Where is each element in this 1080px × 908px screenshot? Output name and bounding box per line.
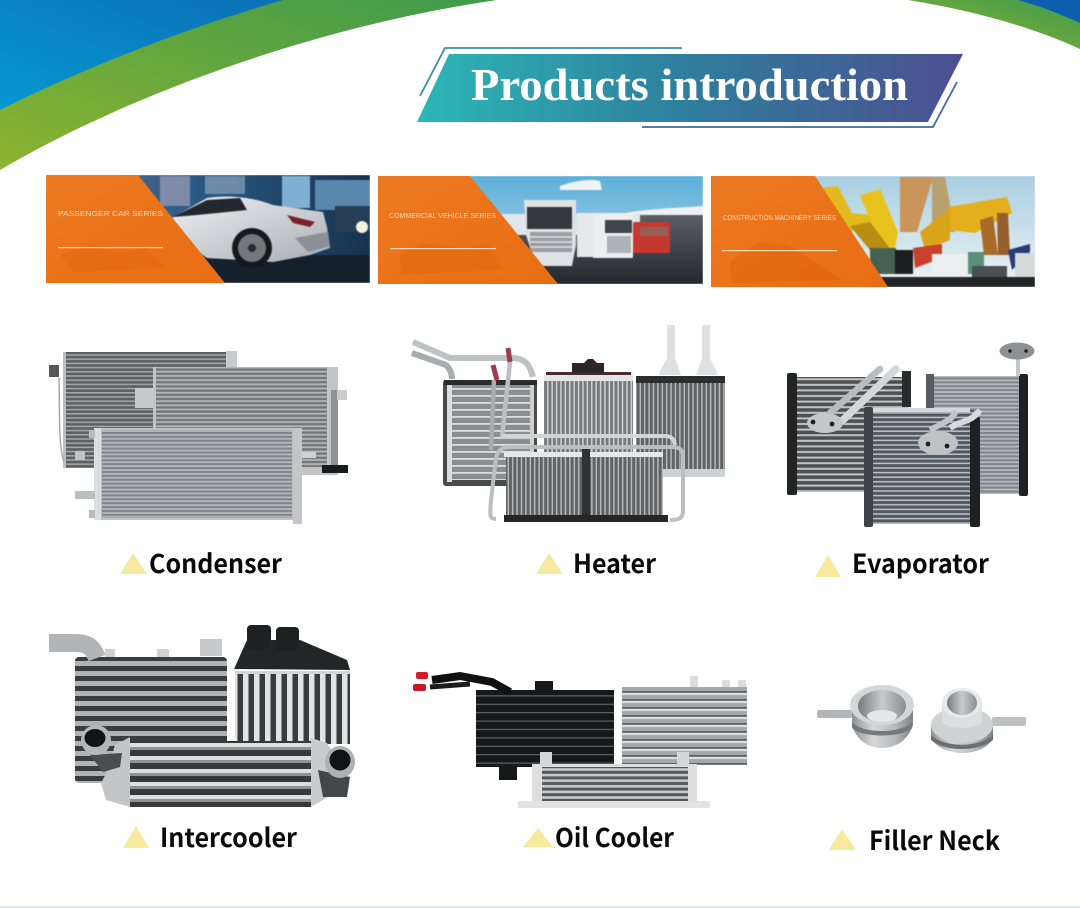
- left heater: [412, 342, 537, 486]
- label: Heater: [536, 544, 657, 581]
- marker triangle: [523, 828, 553, 847]
- label: Filler Neck: Filler Neck: [869, 821, 1000, 858]
- right filler neck: [931, 688, 1026, 753]
- front evaporator: [864, 407, 980, 527]
- product image: oil coolers: [413, 672, 747, 808]
- front intercooler: [81, 725, 355, 807]
- silver oil cooler: [622, 676, 747, 765]
- card 2 label: COMMERCIAL VEHICLE SERIES: [389, 211, 496, 220]
- left evaporator: [787, 371, 911, 495]
- label: Heater: Heater: [573, 544, 657, 581]
- marker triangle: [123, 826, 149, 848]
- middle condenser: [135, 367, 348, 475]
- series card: commercial vehicle: [378, 176, 703, 284]
- middle heater: [544, 359, 633, 455]
- left filler neck: [817, 685, 914, 748]
- marker triangle: [120, 553, 147, 574]
- card 1 label: PASSENGER CAR SERIES: [58, 209, 163, 218]
- product image: filler necks: [817, 685, 1026, 753]
- background swoosh: top right: [908, 0, 1080, 49]
- right evaporator: [926, 342, 1034, 496]
- product image: evaporators: [787, 342, 1034, 527]
- marker triangle: [829, 829, 856, 850]
- title text: Products introduction: [471, 59, 908, 110]
- label: Evaporator: Evaporator: [852, 544, 990, 581]
- product image: intercoolers: [49, 625, 355, 807]
- product image: heaters: [412, 325, 725, 522]
- right heater: [636, 325, 725, 477]
- front heater: [490, 436, 683, 522]
- label: Intercooler: Intercooler: [160, 818, 298, 855]
- product image: condensers: [49, 351, 348, 524]
- label: Condenser: Condenser: [149, 544, 283, 581]
- series card: passenger car: [46, 175, 370, 283]
- left intercooler: [49, 639, 227, 783]
- title banner: [417, 48, 963, 127]
- front oil cooler: [518, 752, 710, 808]
- right intercooler: [234, 625, 350, 744]
- front condenser: [75, 428, 316, 524]
- card 3 label: CONSTRUCTION MACHINERY SERIES: [723, 213, 836, 222]
- marker triangle: [536, 553, 563, 574]
- back condenser: [49, 351, 237, 468]
- marker triangle: [815, 555, 841, 577]
- label: Oil Cooler: Oil Cooler: [555, 818, 675, 855]
- background swoosh: top left: [0, 0, 497, 170]
- front pipes and flange: [918, 410, 980, 455]
- series card: construction machinery: [711, 176, 1035, 287]
- left pipes and flange: [807, 369, 896, 433]
- black oil cooler: [413, 672, 614, 780]
